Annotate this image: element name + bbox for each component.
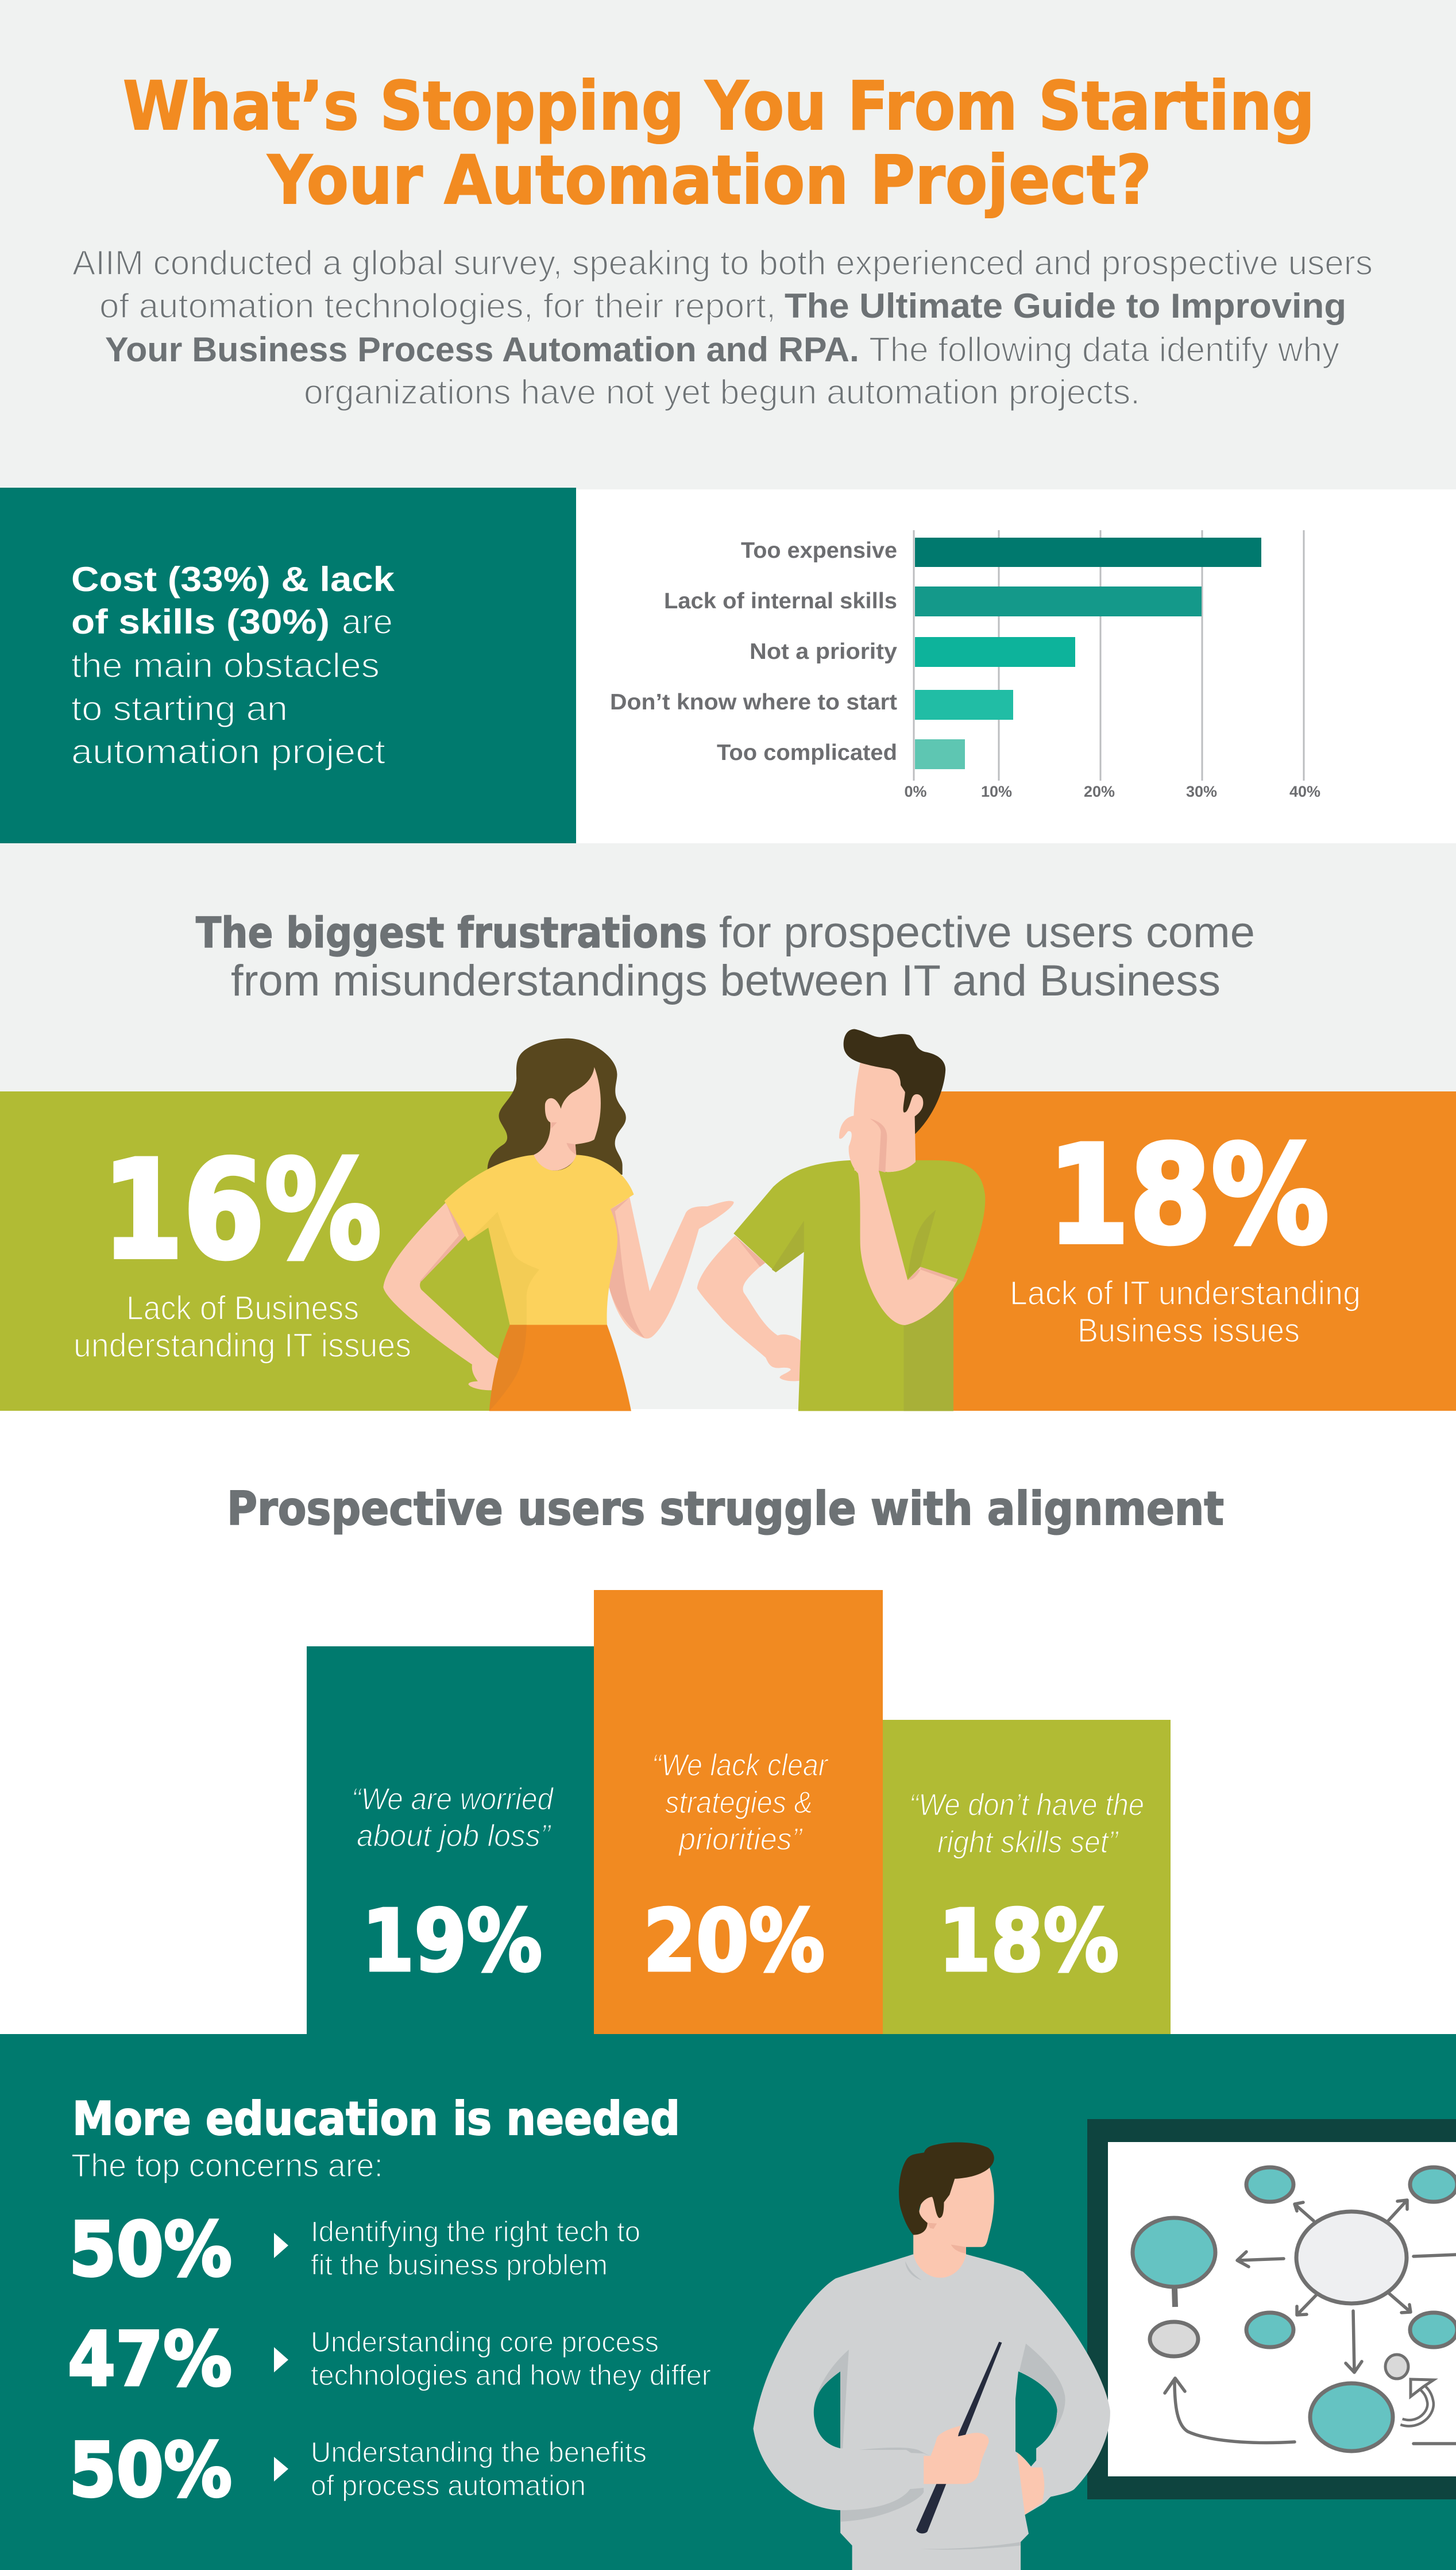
panel: more education — [0, 2034, 1456, 2570]
intro paragraph: of automation technologies, for their report, — [99, 287, 776, 325]
bar labels: Too expensive — [741, 538, 897, 563]
concern 1: 50% — [69, 2206, 232, 2293]
intro paragraph: The Ultimate Guide to Improving — [785, 287, 1346, 325]
bar labels: Not a priority — [750, 639, 897, 664]
obstacles text — [71, 560, 395, 771]
stat: 16% — [74, 1132, 411, 1364]
bar: job loss: 19% — [362, 1892, 542, 1990]
education heading: More education is needed — [72, 2092, 680, 2145]
panel: header — [0, 0, 1456, 489]
orange stat band — [903, 1091, 1456, 1411]
axis labels: 10% — [981, 783, 1012, 800]
intro paragraph: Your Business Process Automation and RPA. — [105, 330, 859, 369]
axis labels: 40% — [1289, 783, 1320, 800]
concern 3: of process automation — [311, 2469, 586, 2502]
bar chart: obstacles — [576, 489, 1456, 844]
axis labels: 0% — [904, 783, 927, 800]
heading: alignment: Prospective users struggle with alignment — [227, 1482, 1224, 1535]
obstacles text: are — [342, 603, 393, 641]
frustrations heading — [196, 908, 1255, 1005]
concern 2: 47% — [68, 2316, 232, 2403]
concern 3 — [69, 2426, 647, 2514]
bar: strategies: 20% — [643, 1892, 825, 1990]
intro paragraph: AIIM conducted a global survey, speaking to both experienced and prospective users — [72, 244, 1373, 282]
panel: main obstacles — [0, 488, 576, 844]
bar labels — [610, 538, 897, 765]
green stat band — [0, 1091, 546, 1411]
illustration: woman — [383, 1039, 734, 1411]
concern 1: fit the business problem — [311, 2249, 608, 2281]
bar: job loss: about job loss” — [357, 1819, 551, 1853]
bar: strategies: “We lack clear — [652, 1748, 829, 1782]
bar: strategies: priorities” — [678, 1822, 803, 1857]
title: Your Automation Project? — [267, 141, 1152, 219]
concern 3: 50% — [69, 2426, 232, 2514]
stat: 18%: Lack of IT understanding — [1010, 1275, 1361, 1312]
bars — [915, 538, 1261, 769]
bar: job loss: “We are worried — [352, 1782, 554, 1816]
title — [123, 67, 1315, 219]
illustration: thinking man — [697, 1029, 985, 1411]
concern 3: Understanding the benefits — [311, 2436, 647, 2468]
illustration: whiteboard diagram — [1087, 2119, 1456, 2499]
stat: 16%: understanding IT issues — [74, 1327, 411, 1364]
concern 1 — [69, 2206, 640, 2293]
panel: alignment bars — [307, 1590, 1171, 2034]
frustrations heading: The biggest frustrations — [196, 909, 707, 958]
illustration: presenter — [753, 2142, 1110, 2570]
frustrations heading: from misunderstandings between IT and Business — [231, 956, 1221, 1005]
title: What’s Stopping You From Starting — [123, 67, 1315, 145]
stat: 16%: Lack of Business — [126, 1290, 359, 1327]
bar: strategies — [594, 1590, 883, 2034]
intro paragraph: organizations have not yet begun automation projects. — [304, 373, 1140, 411]
frustrations heading: for prospective users come — [719, 908, 1255, 957]
axis labels — [904, 783, 1320, 800]
concern 2: Understanding core process — [311, 2326, 659, 2358]
panel: biggest frustrations — [0, 843, 1456, 1411]
intro paragraph — [72, 244, 1373, 411]
education subheading: The top concerns are: — [71, 2147, 383, 2184]
concern 2: technologies and how they differ — [311, 2359, 711, 2391]
bar: strategies: strategies & — [665, 1785, 813, 1820]
intro paragraph: The following data identify why — [869, 330, 1339, 369]
bar: skills: “We don’t have the — [909, 1788, 1144, 1822]
axis labels: 30% — [1186, 783, 1217, 800]
obstacles text: the main obstacles — [71, 646, 380, 685]
stat: 18% — [1010, 1117, 1361, 1349]
bar labels: Lack of internal skills — [664, 589, 897, 613]
axis labels: 20% — [1084, 783, 1115, 800]
bar labels: Don’t know where to start — [610, 690, 897, 715]
stat: 18%: Business issues — [1077, 1312, 1300, 1349]
bar labels: Too complicated — [717, 740, 897, 765]
obstacles text: to starting an — [71, 689, 288, 728]
obstacles text: of skills (30%) — [71, 603, 330, 641]
obstacles text: automation project — [71, 732, 385, 771]
bar: skills — [883, 1720, 1171, 2034]
concern 1: Identifying the right tech to — [311, 2216, 640, 2248]
bar: skills: right skills set” — [937, 1825, 1119, 1859]
stat: 18%: 18% — [1048, 1117, 1329, 1274]
concern 2 — [68, 2316, 711, 2403]
obstacles text: Cost (33%) & lack — [71, 560, 395, 599]
bar: skills: 18% — [939, 1892, 1119, 1990]
stat: 16%: 16% — [102, 1132, 381, 1289]
bar: job loss — [307, 1646, 594, 2034]
